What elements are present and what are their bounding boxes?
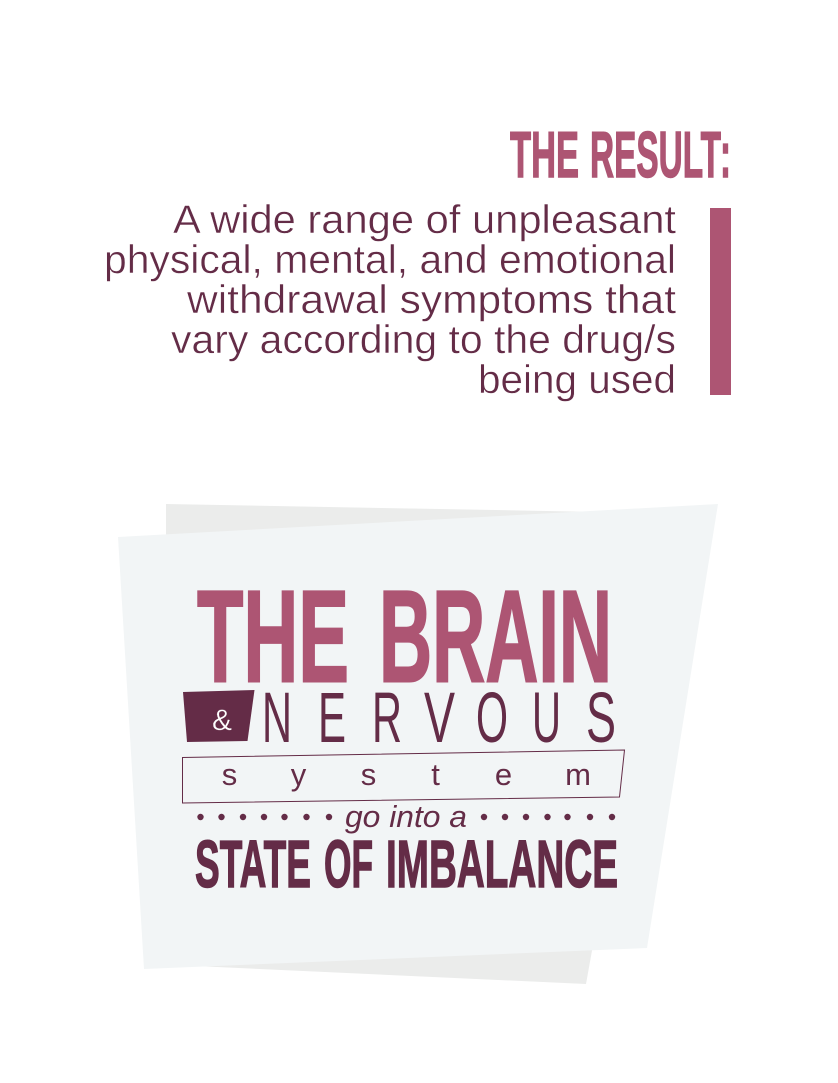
title: nervous: N <box>262 679 292 758</box>
heading: the result <box>510 118 731 191</box>
title: nervous <box>262 679 616 758</box>
title: the brain <box>197 562 612 710</box>
title: nervous: U <box>532 679 561 758</box>
text block: withdrawal symptoms description: being used <box>478 358 676 402</box>
outlined box: system: y <box>291 757 307 792</box>
outlined box: system: s <box>361 757 376 792</box>
text block: withdrawal symptoms description <box>104 198 676 402</box>
badge: ampersand <box>183 690 254 742</box>
badge: ampersand: & <box>212 704 232 737</box>
dotted line: right <box>481 814 615 820</box>
title: nervous: R <box>372 679 402 758</box>
text block: withdrawal symptoms description: physical, mental, and emotional <box>104 238 676 282</box>
heading: the result: THE <box>510 118 579 191</box>
outlined box: system: s <box>222 757 237 792</box>
panel: front sheet <box>118 504 718 969</box>
outlined box: system: t <box>431 757 440 792</box>
title: nervous: O <box>476 679 508 758</box>
outlined box: system <box>182 750 624 803</box>
title: nervous: V <box>424 679 455 758</box>
text block: withdrawal symptoms description: A wide range of unpleasant <box>173 198 676 242</box>
accent bar <box>710 208 731 395</box>
title: state of imbalance: OF <box>324 827 373 902</box>
title: the brain: THE <box>197 562 349 710</box>
outlined box: system: e <box>495 757 512 792</box>
title: state of imbalance <box>195 827 618 902</box>
dotted line: left <box>197 814 332 820</box>
title: nervous: S <box>586 679 616 758</box>
title: state of imbalance: STATE <box>195 827 311 902</box>
panel: back sheet bottom <box>195 945 593 984</box>
heading: the result: : <box>720 118 731 191</box>
outlined box: system: m <box>565 757 591 792</box>
title: state of imbalance: IMBALANCE <box>386 827 618 902</box>
title: nervous: E <box>318 679 346 758</box>
text block: withdrawal symptoms description: withdrawal symptoms that <box>186 278 676 322</box>
panel: back sheet top <box>166 504 585 536</box>
text: go into a: go into a <box>345 799 467 834</box>
text block: withdrawal symptoms description: vary according to the drug/s <box>171 318 676 362</box>
title: the brain: BRAIN <box>379 562 612 710</box>
heading: the result: RESULT <box>590 118 721 191</box>
